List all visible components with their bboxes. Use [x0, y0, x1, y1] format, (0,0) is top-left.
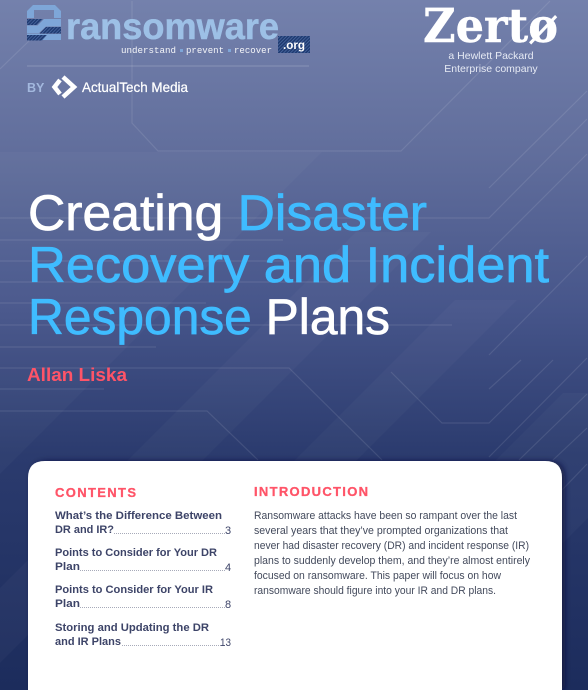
title: Response Plans: [28, 289, 390, 345]
badge: .org: .org: [283, 38, 305, 52]
tagline: recover: [234, 46, 272, 56]
toc entry 3: 8: [225, 599, 231, 611]
body text: plans to suddenly develop them, and they’re almost entirely: [254, 555, 531, 567]
byline: ActualTech Media: [27, 77, 188, 97]
panel: introduction: [254, 484, 531, 597]
body text: several years that they’ve prompted organizations that: [254, 525, 508, 537]
tagline: [121, 46, 272, 56]
toc entry 3: Points to Consider for Your IR: [55, 584, 213, 596]
toc entry 1: [55, 510, 231, 537]
logo: ransomware.org: [27, 5, 310, 56]
panel: white card: [28, 461, 562, 690]
toc entry 1: What’s the Difference Between: [55, 510, 222, 522]
heading: contents: CONTENTS: [55, 485, 136, 500]
body text: focused on ransomware. This paper will focus on how: [254, 570, 501, 582]
body text: never had disaster recovery (DR) and incident response (IR): [254, 540, 529, 552]
toc entry 4: and IR Plans: [55, 636, 121, 648]
icon: ActualTech chevrons: [54, 77, 74, 97]
toc entry 4: [55, 622, 231, 649]
logo: Zerto: Zertø: [423, 0, 558, 54]
logo: Zerto: Enterprise company: [444, 63, 538, 75]
toc entry 2: Plan: [55, 561, 80, 573]
toc entry 2: Points to Consider for Your DR: [55, 547, 217, 559]
toc entry 2: 4: [225, 562, 231, 574]
body text: ransomware should figure into your IR and DR plans.: [254, 585, 496, 597]
toc entry 3: Plan: [55, 598, 80, 610]
title: Creating Disaster: [28, 185, 427, 241]
divider: [27, 65, 309, 67]
tagline: prevent: [186, 46, 224, 56]
icon: ransomware lock: [27, 5, 61, 40]
logo: Zerto: [423, 0, 558, 75]
author: Allan Liska: [27, 365, 128, 385]
body text: Ransomware attacks have been so rampant over the last: [254, 510, 517, 522]
toc entry 1: DR and IR?: [55, 524, 114, 536]
toc entry 2: [55, 547, 231, 574]
title: Recovery and Incident: [28, 237, 549, 293]
subtitle: Hewlett Packard: a Hewlett Packard: [448, 50, 534, 62]
badge: .org: [278, 36, 310, 53]
title: [28, 185, 549, 345]
byline: ActualTech Media: BY: [27, 81, 45, 95]
heading: introduction: INTRODUCTION: [254, 484, 368, 499]
body text: [254, 510, 531, 597]
byline: ActualTech Media: ActualTech Media: [82, 79, 188, 95]
toc entry 1: 3: [225, 525, 231, 537]
toc entry 3: [55, 584, 231, 611]
toc entry 4: Storing and Updating the DR: [55, 622, 209, 634]
panel: contents: [55, 485, 231, 649]
tagline: understand: [121, 46, 176, 56]
toc entry 4: 13: [220, 637, 231, 649]
wordmark: ransomware: ransomware: [66, 6, 279, 47]
